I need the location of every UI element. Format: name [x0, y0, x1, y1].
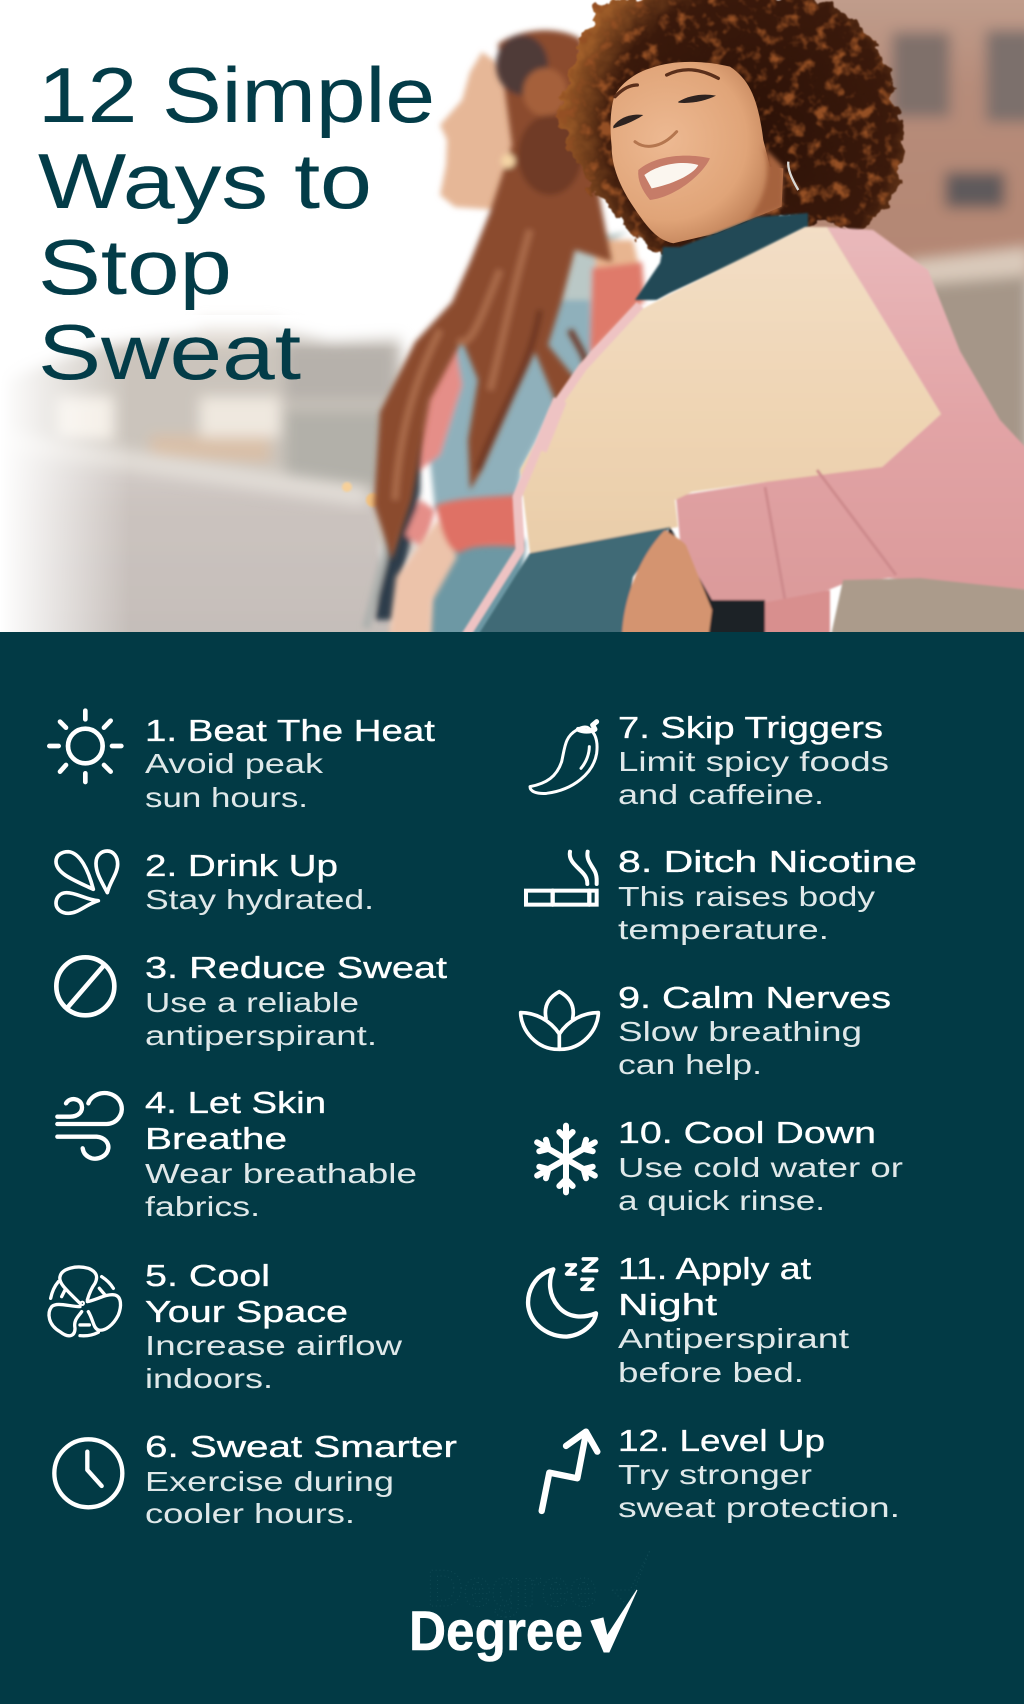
tip 11: apply at night: 11. Apply at [618, 1251, 811, 1286]
second woman: face [440, 52, 520, 210]
background: blurred street, building and wall [0, 0, 1024, 660]
tip 12: level up: Try stronger [618, 1459, 812, 1490]
main woman: face [611, 62, 798, 243]
title: Sweat [38, 308, 301, 396]
tip 9: calm nerves [521, 980, 891, 1080]
main woman: afro hair [560, 0, 903, 262]
icon: fan [49, 1267, 121, 1336]
tip 5: cool your space [49, 1258, 403, 1394]
tip 10: cool down: a quick rinse. [618, 1185, 825, 1216]
tip 11: apply at night: Antiperspirant [618, 1323, 849, 1354]
icon: cigarette [526, 852, 597, 905]
icon: snowflake [534, 1126, 598, 1192]
dark tips panel [0, 632, 1024, 1704]
tip 4: let skin breathe [57, 1085, 417, 1222]
title: Stop [38, 223, 232, 311]
tip 4: let skin breathe: fabrics. [145, 1191, 260, 1222]
second woman: arm and hand [386, 495, 521, 660]
second woman: vest and tops [366, 232, 645, 660]
tip 3: reduce sweat: Use a reliable [145, 987, 359, 1018]
tip 5: cool your space: Your Space [145, 1294, 348, 1329]
icon: water drops [56, 851, 118, 913]
icon: prohibited sign [56, 957, 114, 1015]
tip 6: sweat smarter: cooler hours. [145, 1498, 355, 1529]
tip 10: cool down: Use cold water or [618, 1152, 903, 1183]
tip 12: level up: sweat protection. [618, 1492, 900, 1523]
second woman, in profile [366, 30, 645, 660]
tip 1: beat the heat: Avoid peak [145, 748, 324, 779]
tip 7: skip triggers: Limit spicy foods [618, 746, 889, 777]
tip 5: cool your space: Increase airflow [145, 1330, 403, 1361]
main woman: cardigan and sleeves [463, 227, 1024, 640]
tip 11: apply at night [528, 1251, 849, 1388]
title: 12 Simple [38, 51, 435, 139]
tip 4: let skin breathe: 4. Let Skin [145, 1085, 326, 1120]
tip 11: apply at night: before bed. [618, 1357, 804, 1388]
tip 6: sweat smarter [54, 1429, 457, 1529]
tip 8: ditch nicotine: 8. Ditch Nicotine [618, 844, 917, 879]
title: Ways to [38, 137, 372, 225]
tip 1: beat the heat: 1. Beat The Heat [145, 713, 435, 748]
icon: moon with zzz [528, 1259, 597, 1337]
main woman: collar [635, 213, 808, 300]
tip 11: apply at night: Night [618, 1287, 718, 1322]
tip 4: let skin breathe: Wear breathable [145, 1158, 417, 1189]
tip 9: calm nerves: 9. Calm Nerves [618, 980, 891, 1015]
tip 9: calm nerves: Slow breathing [618, 1016, 862, 1047]
tip 4: let skin breathe: Breathe [145, 1121, 287, 1156]
tip 10: cool down [534, 1115, 903, 1216]
hero photo: two women leaning on a wall [0, 0, 1024, 632]
tip 5: cool your space: 5. Cool [145, 1258, 270, 1293]
tip 2: drink up [56, 848, 374, 915]
tip 7: skip triggers [530, 710, 889, 810]
tip 6: sweat smarter: Exercise during [145, 1466, 394, 1497]
tip 8: ditch nicotine: temperature. [618, 914, 829, 945]
logo: Degree with check mark: Degree [409, 1599, 583, 1662]
icon: chili pepper [530, 722, 597, 793]
tip 3: reduce sweat [56, 950, 447, 1051]
tip 3: reduce sweat: antiperspirant. [145, 1020, 377, 1051]
tip 10: cool down: 10. Cool Down [618, 1115, 876, 1150]
tip 2: drink up: 2. Drink Up [145, 848, 338, 883]
tip 8: ditch nicotine: This raises body [618, 881, 875, 912]
icon: sun [49, 711, 121, 782]
tip 8: ditch nicotine [526, 844, 917, 945]
tip 1: beat the heat [49, 711, 435, 813]
icon: lotus [521, 992, 598, 1049]
icon: wind [57, 1093, 122, 1159]
tip 5: cool your space: indoors. [145, 1363, 273, 1394]
ghost logo: faint dotted Degree mark: Degree [427, 1560, 597, 1618]
icon: clock [54, 1439, 122, 1507]
tip 7: skip triggers: and caffeine. [618, 779, 824, 810]
logo check mark [591, 1590, 637, 1652]
second woman: long hair [374, 30, 612, 560]
tip 3: reduce sweat: 3. Reduce Sweat [145, 950, 447, 985]
tip 6: sweat smarter: 6. Sweat Smarter [145, 1429, 457, 1464]
tip 9: calm nerves: can help. [618, 1049, 762, 1080]
tip 2: drink up: Stay hydrated. [145, 884, 374, 915]
icon: rising arrow [542, 1432, 597, 1511]
tip 1: beat the heat: sun hours. [145, 782, 308, 813]
tip 7: skip triggers: 7. Skip Triggers [618, 710, 883, 745]
title [38, 51, 435, 396]
tip 12: level up [542, 1423, 900, 1523]
ghost logo: faint dotted Degree mark [427, 1550, 650, 1618]
tip 12: level up: 12. Level Up [618, 1423, 825, 1458]
